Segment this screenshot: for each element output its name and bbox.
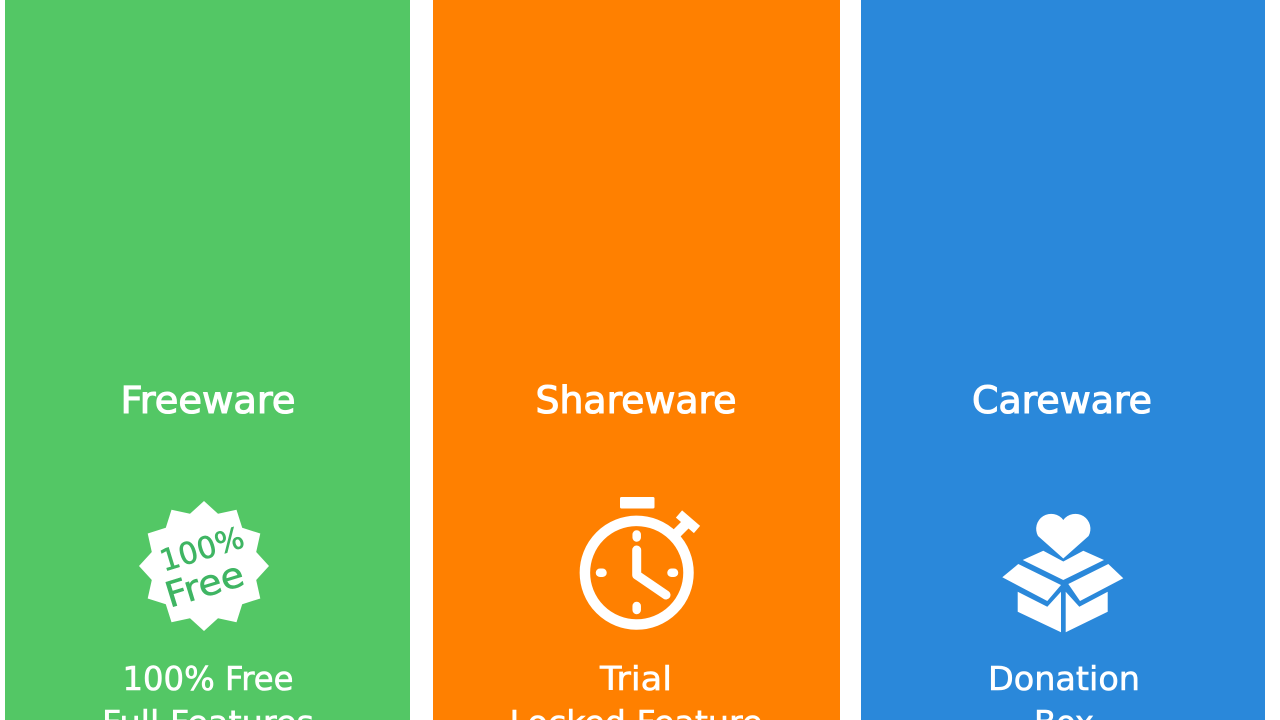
icon: stopwatch (585, 497, 697, 624)
heading: shareware: Shareware (536, 379, 736, 422)
description: careware: Donation (988, 659, 1140, 698)
icon: 100% free badge: Free (161, 555, 249, 616)
panel: freeware (5, 0, 410, 720)
heading: freeware: Freeware (120, 379, 296, 422)
icon: 100% free badge (139, 501, 269, 631)
description: shareware: Trial (599, 659, 672, 698)
panel: shareware (433, 0, 840, 720)
panel: careware (861, 0, 1265, 720)
icon: donation box with heart (1002, 514, 1123, 632)
icon: 100% free badge: 100% (156, 521, 248, 579)
heading: careware: Careware (972, 379, 1152, 422)
description: freeware: 100% Free (122, 659, 294, 698)
